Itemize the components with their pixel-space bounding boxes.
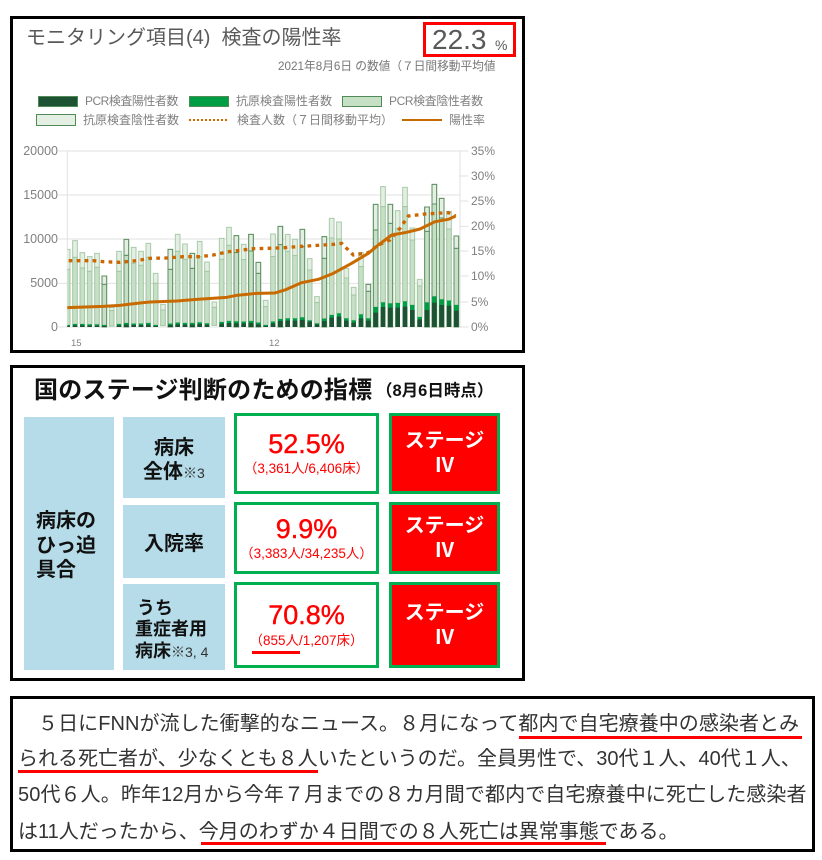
- stage label: row 1: [405, 430, 484, 477]
- stage box: row 3: [389, 582, 500, 668]
- right axis labels: 25%: [471, 194, 495, 208]
- left axis labels: 5000: [30, 276, 58, 290]
- left axis labels: 0: [51, 320, 58, 334]
- right axis labels: [471, 144, 495, 334]
- bars: PCR negative: [65, 204, 459, 326]
- stage label: row 3: [405, 602, 484, 649]
- line: tests moving average (dotted): [69, 213, 456, 262]
- text: line 2: られる死亡者が、少なくとも８人いたというのだ。全員男性で、30代１人、40代１人、: [18, 748, 801, 770]
- text: date note: 2021年8月6日 の数値（７日間移動平均値: [278, 60, 496, 73]
- panel: stage indicators: [10, 365, 525, 681]
- bars: antigen positive: [65, 296, 459, 327]
- row label: severe beds: 重症者用: [135, 619, 207, 639]
- callout: current positivity value: [423, 22, 516, 57]
- detail: all beds: （3,361人/6,406床）: [244, 461, 369, 476]
- category cell: bed pressure: [24, 417, 114, 670]
- right axis labels: 5%: [471, 295, 489, 309]
- legend item: PCR negative: [342, 94, 483, 108]
- panel: positivity rate chart: [10, 16, 525, 353]
- legend item: PCR positive: [38, 94, 178, 108]
- left axis labels: 20000: [23, 144, 58, 158]
- text: line 4: は11人だったから、今月のわずか４日間での８人死亡は異常事態である。: [18, 821, 679, 843]
- value: 52.5%: 52.5%: [268, 429, 345, 459]
- underline: line 2: [18, 770, 318, 773]
- bars: PCR positive: [65, 303, 459, 327]
- legend item: PCR negative: PCR検査陰性者数: [389, 94, 483, 108]
- right axis labels: 15%: [471, 244, 495, 258]
- row label: all beds: [123, 417, 225, 498]
- row label: severe beds: 病床※3, 4: [135, 641, 208, 661]
- legend item: antigen positive: [189, 94, 332, 108]
- line: positivity rate: [67, 216, 456, 308]
- row label: hospitalization rate: 入院率: [144, 533, 204, 555]
- detail: hospitalization: （3,383人/34,235人）: [240, 546, 373, 561]
- underline: line 1: [519, 736, 802, 739]
- callout: current positivity value: 22.3: [432, 24, 486, 55]
- text: line 1: ５日にFNNが流した衝撃的なニュース。８月になって都内で自宅療養中の感染者とみ: [38, 713, 799, 735]
- stage label: row 2: Ⅳ: [434, 540, 454, 562]
- x axis labels: 12: [269, 338, 280, 349]
- row label: severe beds: [123, 584, 225, 670]
- right axis labels: 0%: [471, 320, 489, 334]
- stage label: row 3: Ⅳ: [434, 627, 454, 649]
- row label: hospitalization rate: [123, 505, 225, 578]
- category cell: bed pressure: 病床の: [36, 510, 96, 532]
- value: 9.9%: 9.9%: [276, 514, 337, 544]
- legend item: antigen negative: [36, 113, 179, 127]
- stage box: row 2: [389, 502, 500, 574]
- legend item: tests dotted line: 検査人数（７日間移動平均）: [237, 113, 393, 127]
- underline: line 4: [201, 842, 606, 845]
- detail: severe beds: （855人/1,207床）: [249, 633, 364, 648]
- row label: all beds: 全体※3: [143, 461, 205, 483]
- stage label: row 1: Ⅳ: [434, 455, 454, 477]
- stage label: row 3: ステージ: [405, 602, 484, 624]
- right axis labels: 35%: [471, 144, 495, 158]
- right axis labels: 30%: [471, 169, 495, 183]
- value box: all beds: [234, 413, 379, 494]
- legend item: antigen positive: 抗原検査陽性者数: [236, 94, 332, 108]
- text: line 3: 50代６人。昨年12月から今年７月までの８カ月間で都内で自宅療養中に死亡した感染者: [18, 784, 807, 806]
- legend item: positivity line: 陽性率: [449, 113, 485, 127]
- left axis labels: 10000: [23, 232, 58, 246]
- heading: monitoring item title: モニタリング項目(4) 検査の陽性率: [26, 27, 342, 49]
- left axis labels: 15000: [23, 188, 58, 202]
- row label: all beds: 病床: [154, 437, 194, 459]
- stage label: row 2: ステージ: [405, 515, 484, 537]
- left axis labels: [23, 144, 58, 334]
- panel: article excerpt: [10, 696, 815, 852]
- stage label: row 1: ステージ: [405, 430, 484, 452]
- legend item: antigen negative: 抗原検査陰性者数: [83, 113, 179, 127]
- bars: antigen negative: [65, 184, 459, 311]
- value: 70.8%: 70.8%: [268, 600, 345, 630]
- text: as-of date: （8月6日時点）: [376, 382, 493, 400]
- right axis labels: 10%: [471, 269, 495, 283]
- chart: tests and positivity rate: [23, 144, 495, 349]
- row label: severe beds: うち: [137, 598, 173, 618]
- heading: stage indicators title: 国のステージ判断のための指標: [34, 377, 372, 404]
- legend item: PCR positive: PCR検査陽性者数: [85, 94, 178, 108]
- category cell: bed pressure: ひっ迫: [36, 534, 96, 556]
- callout: current positivity value: %: [495, 37, 507, 53]
- stage box: row 1: [389, 413, 500, 494]
- x axis labels: 15: [71, 338, 82, 349]
- bars: dark outlined variants: [102, 184, 459, 327]
- stage label: row 2: [405, 515, 484, 562]
- value box: hospitalization: [234, 502, 379, 574]
- x axis labels: [71, 338, 280, 349]
- right axis labels: 20%: [471, 219, 495, 233]
- value box: severe beds: [234, 582, 379, 668]
- legend: [36, 94, 485, 127]
- underline: 855 people: [252, 651, 300, 654]
- category cell: bed pressure: 具合: [36, 559, 76, 581]
